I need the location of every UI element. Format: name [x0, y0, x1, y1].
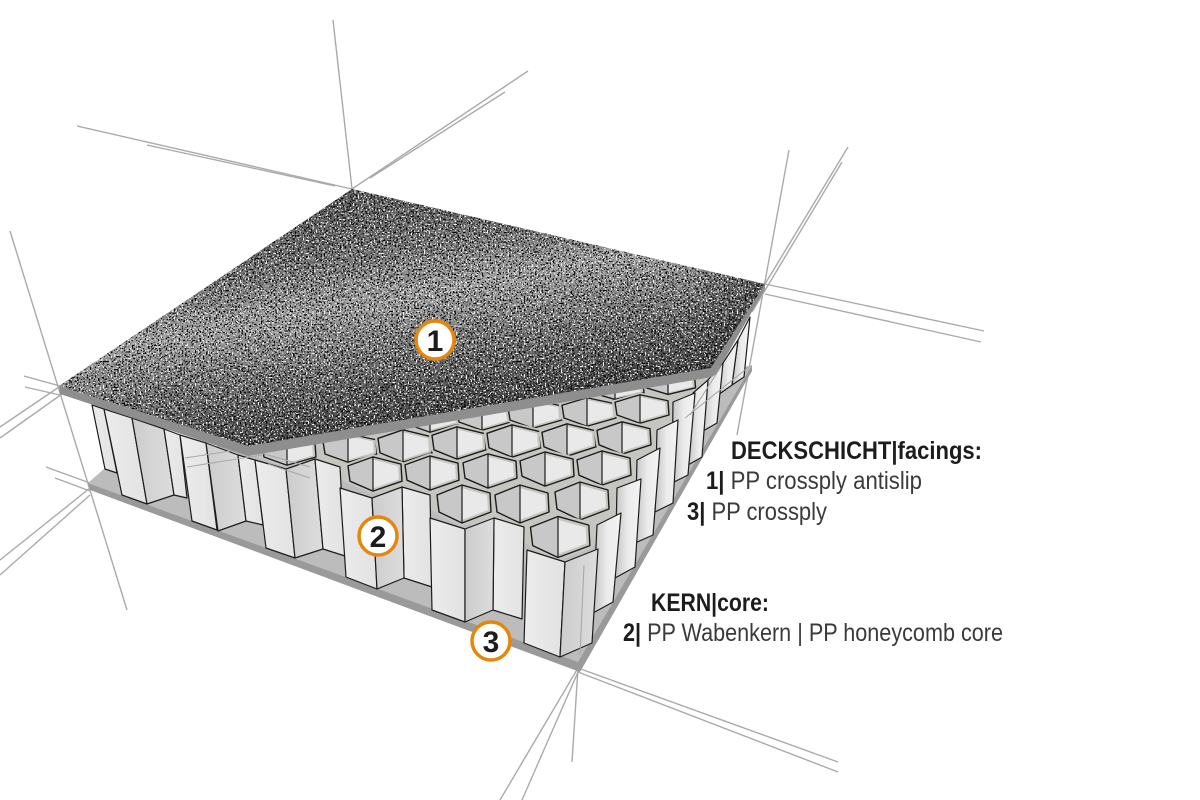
- hexagon cells, middle rows: [348, 422, 651, 558]
- marker 3: 3: [483, 626, 499, 659]
- heading: core: KERN|core:: [651, 589, 769, 617]
- cell walls, far right side: [593, 317, 750, 613]
- heading: facings: DECKSCHICHT|facings:: [731, 437, 982, 465]
- item 1: 1| PP crossply antislip: [706, 467, 922, 495]
- marker 3: [472, 622, 510, 660]
- hexagon cells, back rows: [262, 372, 696, 465]
- marker 2: [359, 517, 397, 555]
- item 2: 2| PP Wabenkern | PP honeycomb core: [623, 619, 1003, 647]
- item 3: 3| PP crossply: [687, 498, 827, 526]
- construction lines: [0, 20, 984, 800]
- faint lines over core: [185, 365, 750, 655]
- top facing sheet edge: [59, 284, 765, 456]
- bottom facing sheet (3): [88, 365, 752, 672]
- marker 1: 1: [427, 325, 443, 358]
- legend: core: [623, 589, 1003, 647]
- legend: facings: [687, 437, 982, 526]
- top facing sheet (1), antislip surface: [59, 189, 765, 446]
- honeycomb core (2): [92, 317, 750, 657]
- core top backing: [250, 365, 720, 545]
- marker 2: 2: [370, 521, 386, 554]
- marker 1: [416, 321, 454, 359]
- cell walls, front left side: [92, 405, 598, 657]
